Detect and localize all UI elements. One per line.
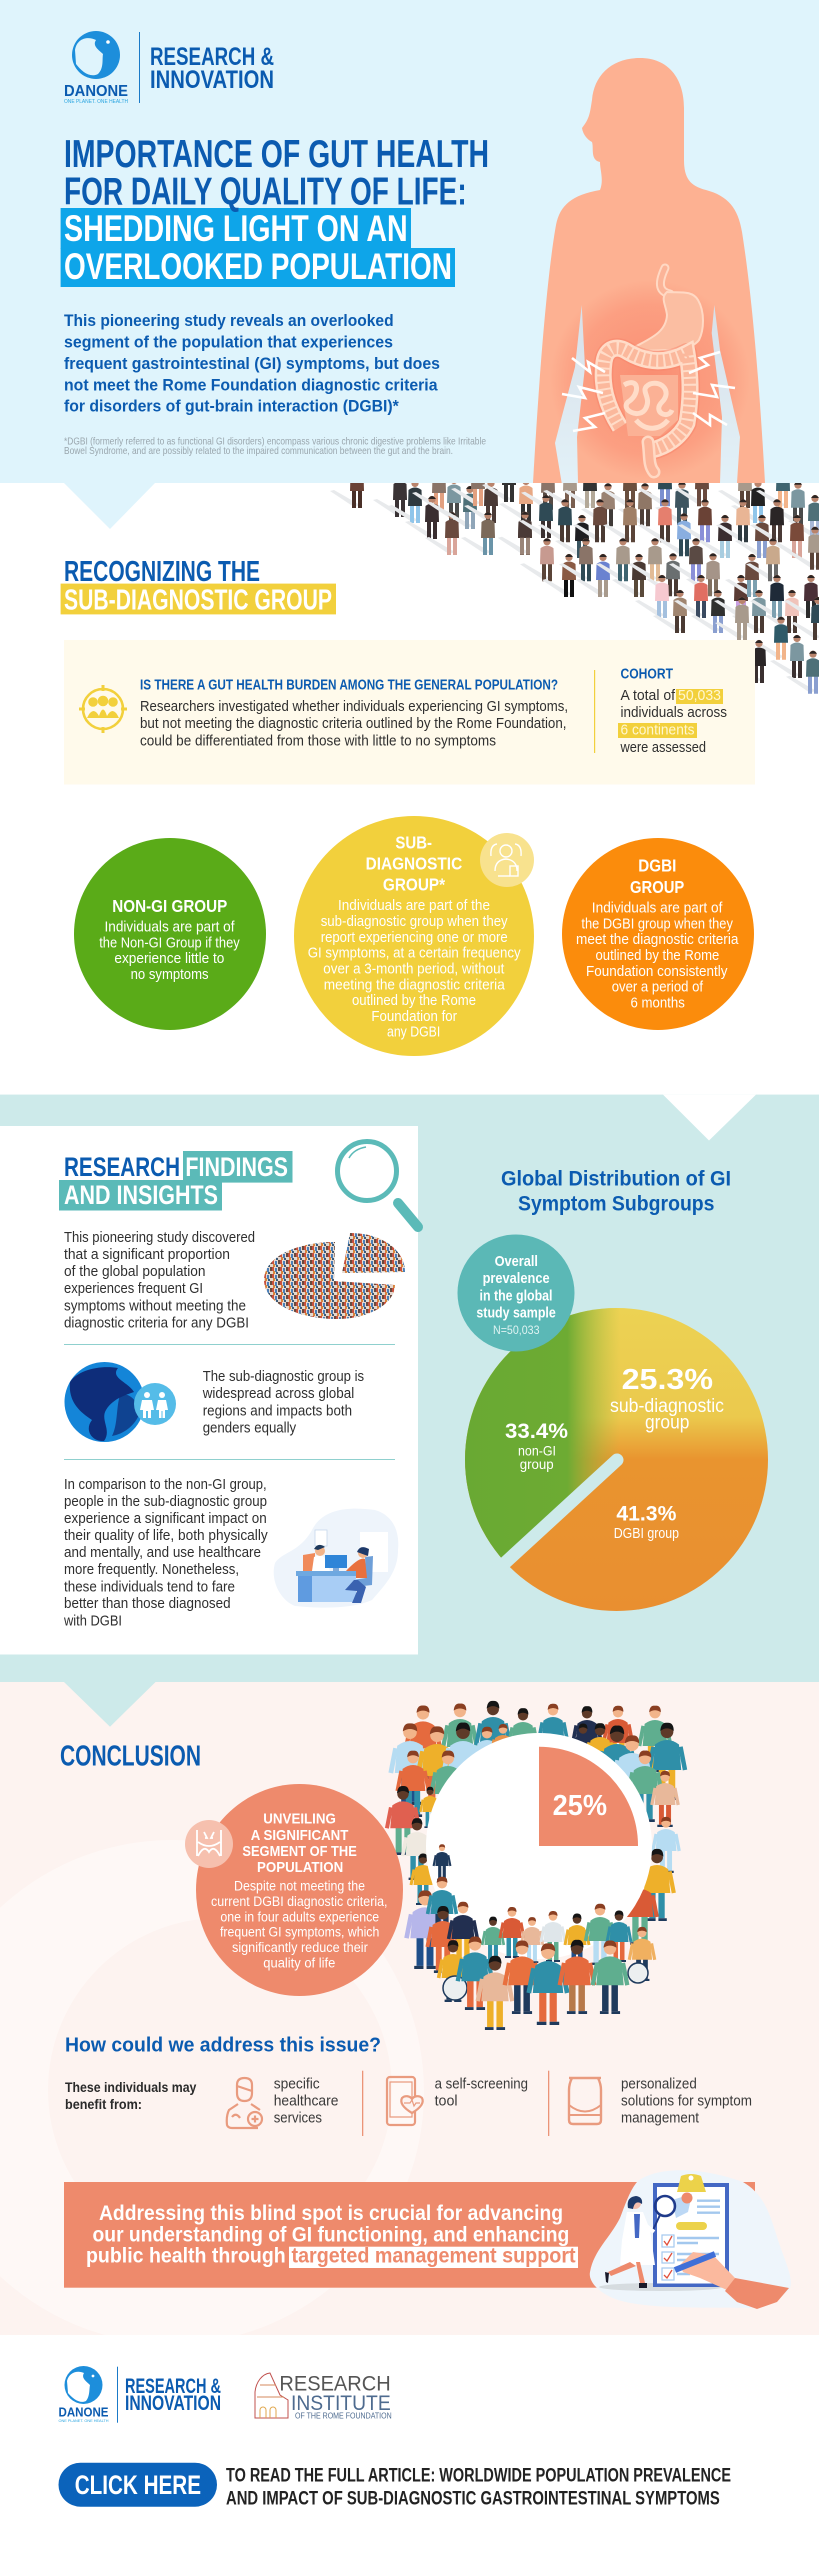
icon: jar with gut bbox=[569, 2078, 601, 2124]
panel: sub-diagnostic group: any DGBI bbox=[387, 1025, 440, 1041]
callout: unveiling a significant segment: SEGMENT OF THE bbox=[242, 1843, 357, 1860]
label: non-GI group: 33.4% bbox=[505, 1420, 568, 1443]
text: a self-screening tool: tool bbox=[435, 2093, 458, 2110]
text: cohort: A total of bbox=[620, 687, 676, 704]
text: finding two: The sub-diagnostic group is bbox=[203, 1368, 364, 1385]
panel: sub-diagnostic group: GI symptoms, at a certain frequency bbox=[308, 946, 521, 962]
banner: key message: public health through bbox=[86, 2244, 286, 2268]
text: these individuals may benefit from bbox=[65, 2080, 197, 2112]
panel: non-GI group: NON-GI GROUP bbox=[112, 896, 228, 916]
panel: conclusion background bbox=[0, 1682, 819, 2344]
icon: healthcare professional bbox=[227, 2078, 262, 2128]
panel: DGBI group: DGBI bbox=[638, 856, 676, 876]
icon: magnifying glass bbox=[338, 1142, 418, 1227]
banner: key message: targeted management support bbox=[292, 2244, 576, 2268]
panel: DGBI group: over a period of bbox=[612, 980, 704, 996]
callout: overall prevalence: N=50,033 bbox=[493, 1323, 540, 1337]
logo: Danone research and innovation footer: ONE PLANET. ONE HEALTH bbox=[58, 2418, 109, 2423]
logo: Danone research and innovation: DANONE bbox=[64, 83, 128, 100]
footnote bbox=[64, 436, 486, 457]
logo: Danone research and innovation footer: INNOVATION bbox=[125, 2392, 221, 2415]
logo: Danone research and innovation: INNOVATION bbox=[150, 66, 274, 94]
arrow: section pointer blue bbox=[64, 483, 155, 529]
heading: research findings and insights bbox=[59, 1151, 292, 1210]
illustration: body with gut bbox=[533, 58, 765, 483]
text: finding one: diagnostic criteria for any DGBI bbox=[64, 1314, 249, 1331]
icon: target with people bbox=[79, 685, 127, 733]
logo: Danone research and innovation footer: RESEARCH & bbox=[125, 2375, 221, 2398]
text: personalized solutions bbox=[621, 2076, 752, 2127]
callout: unveiling a significant segment: one in four adults experience bbox=[220, 1909, 379, 1924]
panel: sub-diagnostic group: GROUP* bbox=[383, 874, 445, 894]
text: cohort: individuals across bbox=[620, 704, 727, 721]
panel: sub-diagnostic group: DIAGNOSTIC bbox=[366, 854, 463, 874]
text: finding three bbox=[63, 1476, 268, 1629]
footnote: Bowel Syndrome, and are possibly related to the impaired communication between the gut and the brain. bbox=[64, 445, 453, 457]
chart title: Global Distribution of GI bbox=[501, 1167, 731, 1191]
callout: overall prevalence: Overall bbox=[495, 1253, 538, 1270]
intro text: This pioneering study reveals an overlooked bbox=[64, 312, 394, 330]
people behind the pie bbox=[387, 1701, 685, 1945]
icon: person with clipboard bbox=[480, 833, 534, 887]
text: finding two: genders equally bbox=[203, 1420, 297, 1436]
text: read the full article bbox=[226, 2465, 731, 2509]
callout: overall prevalence: prevalence bbox=[483, 1270, 550, 1287]
title: FOR DAILY QUALITY OF LIFE: bbox=[64, 170, 467, 214]
illustration: crowd bbox=[330, 483, 819, 694]
intro text: frequent gastrointestinal (GI) symptoms, but does bbox=[64, 355, 440, 373]
text: finding one: symptoms without meeting the bbox=[64, 1297, 246, 1314]
text: finding three: more frequently. Nonetheless, bbox=[64, 1561, 239, 1578]
text: finding three: with DGBI bbox=[63, 1612, 122, 1629]
text: research question: could be differentiated from those with little to no symptoms bbox=[140, 733, 496, 750]
panel: DGBI group bbox=[562, 838, 754, 1030]
callout: overall prevalence: study sample bbox=[476, 1305, 556, 1322]
text: specific healthcare services: services bbox=[274, 2110, 322, 2127]
text: finding two: widespread across global bbox=[202, 1385, 354, 1402]
heading: research findings and insights: RESEARCH bbox=[64, 1152, 180, 1182]
banner: key message: Addressing this blind spot is crucial for advancing bbox=[99, 2201, 563, 2225]
heading: research findings and insights: AND INSIGHTS bbox=[64, 1180, 218, 1210]
panel: sub-diagnostic group: Individuals are part of the bbox=[338, 898, 490, 914]
text: finding three: In comparison to the non-GI group, bbox=[64, 1476, 267, 1493]
text: a self-screening tool: a self-screening bbox=[435, 2076, 528, 2093]
icon: pie made of people bbox=[264, 1233, 405, 1319]
text: finding three: their quality of life, both physically bbox=[64, 1527, 268, 1544]
label: non-GI group: group bbox=[520, 1456, 554, 1472]
label: DGBI group: DGBI group bbox=[614, 1526, 679, 1542]
title bbox=[61, 133, 489, 287]
text: finding two: regions and impacts both bbox=[203, 1402, 352, 1419]
chart title bbox=[501, 1167, 731, 1216]
title: IMPORTANCE OF GUT HEALTH bbox=[64, 133, 489, 176]
footnote: *DGBI (formerly referred to as functional GI disorders) encompass various chronic digestive problems like Irritable bbox=[64, 436, 486, 448]
banner: key message bbox=[64, 2182, 755, 2288]
text: finding three: better than those diagnosed bbox=[64, 1595, 231, 1612]
text: personalized solutions: solutions for symptom bbox=[621, 2093, 752, 2110]
text: finding one bbox=[64, 1229, 255, 1331]
pie chart: GI symptom subgroups bbox=[465, 1308, 768, 1611]
people in front of the pie bbox=[407, 1844, 655, 2030]
label: non-GI group bbox=[505, 1420, 568, 1472]
callout: unveiling a significant segment: current DGBI diagnostic criteria, bbox=[211, 1894, 388, 1909]
panel: sub-diagnostic group: sub-diagnostic group when they bbox=[321, 914, 508, 930]
label: sub-diagnostic group: group bbox=[645, 1413, 689, 1434]
panel: DGBI group: Individuals are part of bbox=[592, 901, 723, 917]
panel: sub-diagnostic group bbox=[294, 816, 534, 1056]
illustration: people around 25 percent pie bbox=[387, 1701, 685, 2030]
text: personalized solutions: personalized bbox=[621, 2076, 697, 2093]
panel: non-GI group: the Non-GI Group if they bbox=[99, 935, 240, 951]
text: personalized solutions: management bbox=[621, 2110, 700, 2127]
panel: DGBI group: meet the diagnostic criteria bbox=[576, 932, 739, 948]
panel: sub-diagnostic group: Foundation for bbox=[371, 1009, 457, 1025]
label: sub-diagnostic group: sub-diagnostic bbox=[610, 1396, 724, 1417]
icon: globe with people bbox=[64, 1362, 176, 1442]
logo: Danone research and innovation: RESEARCH & bbox=[150, 43, 274, 71]
illustration: doctor and patient bbox=[274, 1509, 398, 1608]
panel: sub-diagnostic group: outlined by the Rome bbox=[352, 993, 476, 1009]
intro text: segment of the population that experiences bbox=[64, 334, 393, 352]
panel: sub-diagnostic group: SUB- bbox=[395, 832, 432, 852]
panel: sub-diagnostic group: over a 3-month period, without bbox=[323, 962, 504, 978]
button: click here bbox=[58, 2463, 217, 2507]
callout: unveiling a significant segment: significantly reduce their bbox=[232, 1940, 368, 1955]
callout: unveiling a significant segment: POPULATION bbox=[257, 1859, 343, 1876]
icon: abdomen bbox=[185, 1820, 233, 1868]
logo: Research Institute of the Rome Foundation: INSTITUTE bbox=[291, 2391, 391, 2415]
panel: DGBI group: Foundation consistently bbox=[586, 964, 728, 980]
text: cohort bbox=[618, 666, 727, 756]
text: specific healthcare services: healthcare bbox=[274, 2093, 338, 2110]
intro text: for disorders of gut-brain interaction (DGBI)* bbox=[64, 398, 399, 416]
logo: Research Institute of the Rome Foundation: OF THE ROME FOUNDATION bbox=[295, 2412, 392, 2421]
heading: recognizing the sub-diagnostic group: SUB-DIAGNOSTIC GROUP bbox=[64, 584, 332, 616]
text: specific healthcare services bbox=[274, 2076, 338, 2127]
heading: how could we address this issue: How could we address this issue? bbox=[65, 2034, 381, 2057]
intro text bbox=[64, 312, 440, 416]
heading: recognizing the sub-diagnostic group: RECOGNIZING THE bbox=[64, 556, 260, 588]
text: a self-screening tool bbox=[435, 2076, 528, 2110]
text: cohort: 6 continents bbox=[620, 722, 694, 739]
text: finding one: that a significant proportion bbox=[64, 1246, 230, 1263]
text: these individuals may benefit from: benefit from: bbox=[65, 2097, 142, 2112]
text: finding three: people in the sub-diagnostic group bbox=[64, 1493, 267, 1510]
chart title: Symptom Subgroups bbox=[518, 1192, 715, 1216]
label: sub-diagnostic group bbox=[610, 1364, 724, 1434]
panel: DGBI group: the DGBI group when they bbox=[581, 916, 734, 932]
callout: unveiling a significant segment: UNVEILING bbox=[263, 1810, 336, 1827]
panel: header bbox=[0, 0, 819, 483]
text: cohort: COHORT bbox=[620, 666, 673, 682]
panel: research findings background bbox=[0, 1095, 819, 1683]
label: DGBI group: 41.3% bbox=[616, 1502, 677, 1526]
panel: non-GI group: Individuals are part of bbox=[104, 920, 235, 936]
icon: phone with heart bbox=[387, 2077, 423, 2125]
pie: 25 percent bbox=[426, 1733, 652, 1959]
logo: Danone research and innovation bbox=[64, 31, 274, 105]
callout: overall prevalence bbox=[458, 1234, 574, 1352]
panel: non-GI group bbox=[74, 838, 266, 1030]
panel: sub-diagnostic group: meeting the diagnostic criteria bbox=[324, 977, 506, 993]
panel: DGBI group: outlined by the Rome bbox=[596, 948, 719, 964]
pie: 25 percent: 25% bbox=[553, 1790, 607, 1822]
callout: unveiling a significant segment bbox=[185, 1784, 403, 1996]
title: OVERLOOKED POPULATION bbox=[64, 246, 452, 287]
text: specific healthcare services: specific bbox=[274, 2076, 320, 2093]
logo: Research Institute of the Rome Foundation bbox=[255, 2372, 392, 2421]
panel: sub-diagnostic group: report experiencing one or more bbox=[321, 930, 508, 946]
heading: recognizing the sub-diagnostic group bbox=[61, 556, 336, 616]
text: these individuals may benefit from: These individuals may bbox=[65, 2080, 197, 2095]
text: finding one: This pioneering study discovered bbox=[64, 1229, 255, 1246]
text: cohort: were assessed bbox=[620, 739, 706, 756]
heading: research findings and insights: FINDINGS bbox=[185, 1152, 288, 1182]
text: finding one: experiences frequent GI bbox=[64, 1280, 203, 1297]
text: finding one: of the global population bbox=[64, 1263, 206, 1280]
text: research question: Researchers investigated whether individuals experiencing GI symptoms, bbox=[140, 698, 568, 715]
panel: DGBI group: 6 months bbox=[630, 996, 685, 1012]
text: research question: IS THERE A GUT HEALTH BURDEN AMONG THE GENERAL POPULATION? bbox=[140, 678, 558, 694]
text: finding two bbox=[202, 1368, 364, 1436]
label: sub-diagnostic group: 25.3% bbox=[622, 1364, 713, 1396]
panel: non-GI group: experience little to bbox=[114, 951, 224, 967]
logo: Research Institute of the Rome Foundation: RESEARCH bbox=[279, 2372, 391, 2396]
callout: unveiling a significant segment: A SIGNIFICANT bbox=[251, 1827, 348, 1844]
text: finding three: and mentally, and use healthcare bbox=[64, 1544, 261, 1561]
text: cohort: 50,033 bbox=[678, 687, 721, 704]
callout: unveiling a significant segment: frequent GI symptoms, which bbox=[220, 1925, 379, 1940]
intro text: not meet the Rome Foundation diagnostic criteria bbox=[64, 376, 438, 394]
panel: DGBI group: GROUP bbox=[630, 877, 685, 897]
button: click here: CLICK HERE bbox=[75, 2470, 201, 2500]
panel: non-GI group: no symptoms bbox=[131, 967, 209, 983]
text: research question bbox=[140, 678, 568, 750]
callout: unveiling a significant segment: Despite not meeting the bbox=[234, 1879, 365, 1894]
text: finding three: experience a significant impact on bbox=[64, 1510, 267, 1527]
logo: Danone research and innovation footer bbox=[58, 2366, 221, 2423]
logo: Danone research and innovation: ONE PLANET. ONE HEALTH bbox=[64, 99, 128, 105]
logo: Danone research and innovation footer: DANONE bbox=[58, 2406, 108, 2420]
callout: overall prevalence: in the global bbox=[480, 1288, 552, 1304]
label: non-GI group: non-GI bbox=[518, 1442, 556, 1458]
heading: conclusion: CONCLUSION bbox=[60, 1741, 201, 1773]
text: research question: but not meeting the diagnostic criteria outlined by the Rome Foundation, bbox=[140, 715, 566, 732]
banner: key message: our understanding of GI functioning, and enhancing bbox=[92, 2222, 569, 2246]
panel: research question and cohort bbox=[64, 640, 755, 784]
text: finding three: these individuals tend to fare bbox=[64, 1578, 235, 1595]
label: DGBI group bbox=[614, 1502, 679, 1542]
callout: unveiling a significant segment: quality of life bbox=[263, 1955, 335, 1970]
illustration: doctor with checklist bbox=[590, 2170, 791, 2309]
title: SHEDDING LIGHT ON AN bbox=[64, 208, 408, 249]
